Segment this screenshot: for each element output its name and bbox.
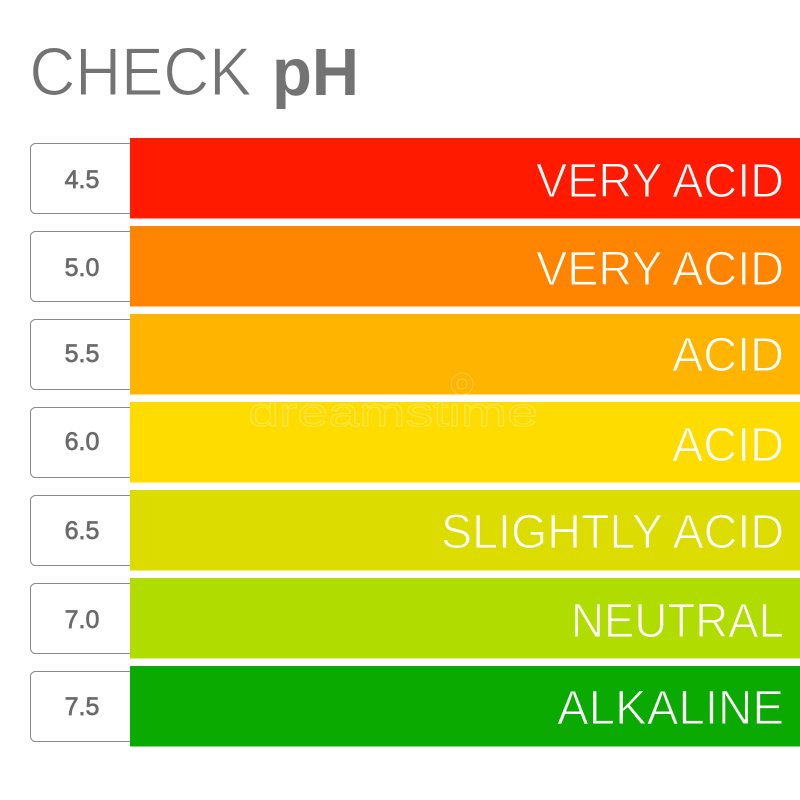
value box: 4.5	[30, 144, 140, 214]
value box: 7.0	[30, 584, 140, 654]
value box: 6.5: 6.5	[65, 517, 99, 545]
row: pH 4.5 very acid	[30, 138, 800, 218]
label: acid: ACID	[672, 329, 784, 382]
title: pH	[272, 35, 359, 110]
label: neutral: NEUTRAL	[571, 595, 784, 648]
title: CHECK	[30, 34, 252, 110]
value box: 7.5: 7.5	[65, 693, 99, 721]
row: pH 7.5 alkaline	[30, 666, 800, 746]
value box: 6.5	[30, 496, 140, 566]
colour bar: yellow	[130, 402, 800, 482]
value box: 6.0: 6.0	[65, 428, 99, 456]
label: alkaline: ALKALINE	[557, 682, 784, 735]
label: very acid: VERY ACID	[536, 155, 784, 208]
watermark	[248, 373, 538, 435]
value box: 5.5	[30, 320, 140, 390]
row: pH 7.0 neutral	[30, 578, 800, 658]
value box: 7.5	[30, 672, 140, 742]
label: slightly acid: SLIGHTLY ACID	[441, 506, 784, 559]
label: very acid: VERY ACID	[536, 243, 784, 296]
watermark: dreamstime	[248, 391, 538, 435]
value box: 5.0	[30, 232, 140, 302]
colour bar: lime	[130, 578, 800, 658]
value box: 4.5: 4.5	[65, 166, 99, 194]
row: pH 5.5 acid	[30, 314, 800, 394]
row: pH 6.5 slightly acid	[30, 490, 800, 570]
colour bar: yellow-green	[130, 490, 800, 570]
row: pH 6.0 acid	[30, 402, 800, 482]
colour bar: green	[130, 666, 800, 746]
colour bar: orange	[130, 226, 800, 306]
value box: 7.0: 7.0	[65, 606, 99, 634]
row: pH 5.0 very acid	[30, 226, 800, 306]
colour bar: amber	[130, 314, 800, 394]
value box: 6.0	[30, 408, 140, 478]
label: acid: ACID	[672, 419, 784, 472]
value box: 5.0: 5.0	[65, 254, 99, 282]
colour bar: red	[130, 138, 800, 218]
value box: 5.5: 5.5	[65, 340, 99, 368]
